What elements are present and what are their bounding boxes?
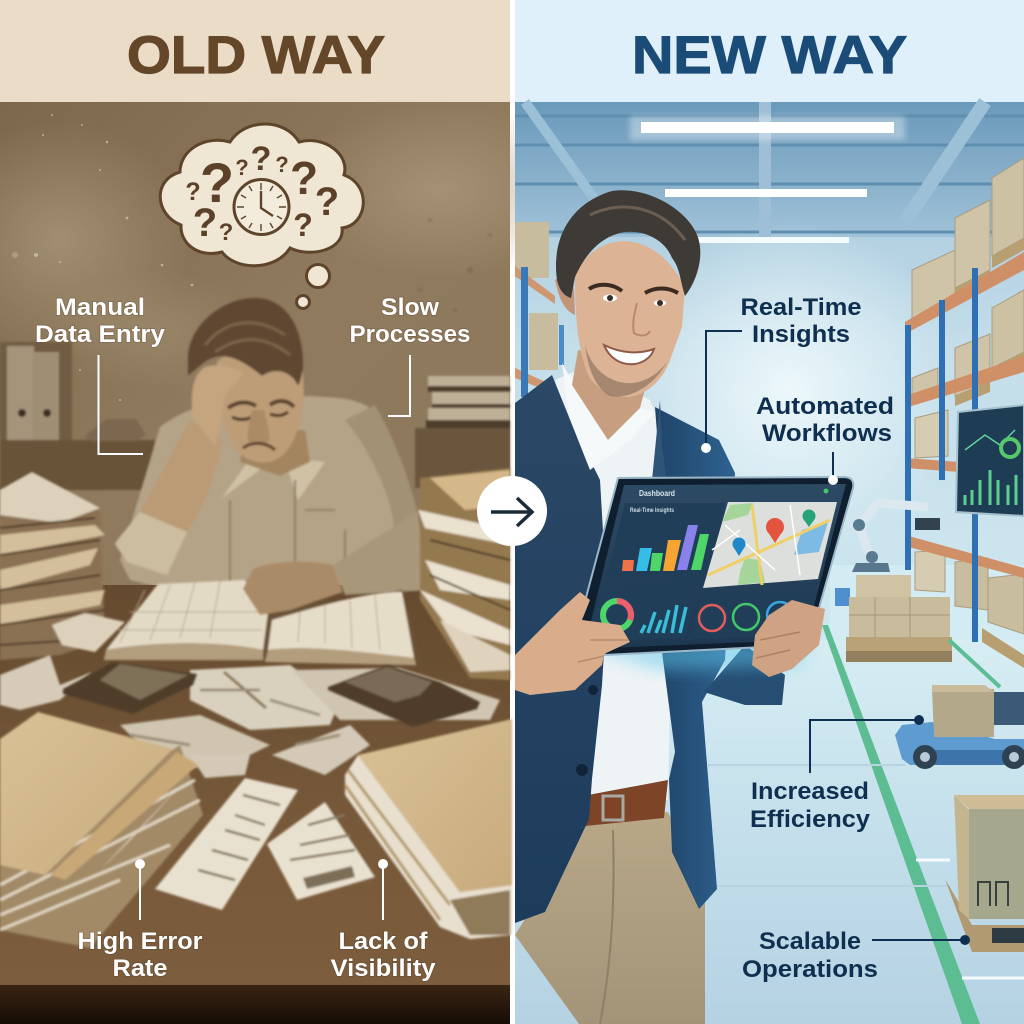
hair	[188, 298, 303, 385]
blue uprights	[908, 268, 975, 642]
label: high error rate: Rate	[112, 955, 168, 982]
tablet glow	[580, 640, 808, 670]
hand over ledger	[243, 562, 343, 615]
question marks	[185, 140, 339, 246]
paper stack and cabinet, back right	[415, 376, 510, 488]
question marks: ?	[219, 219, 233, 246]
question marks: ?	[193, 201, 217, 245]
ceiling beams	[515, 102, 1024, 240]
label: slow processes	[350, 294, 470, 416]
raised arm and hand	[115, 420, 222, 575]
shirt	[555, 365, 675, 800]
neck and head	[240, 430, 310, 476]
stubble	[585, 345, 667, 397]
label: scalable operations: Operations	[742, 956, 878, 983]
scene: sepia office wall	[0, 100, 590, 602]
desk	[0, 585, 510, 1024]
panel: old way	[0, 0, 590, 1024]
large crate on pallet	[945, 795, 1024, 952]
label: high error rate: High Error	[78, 928, 202, 955]
dashboard title bar: Dashboard	[639, 489, 675, 498]
paper stack, left	[0, 472, 125, 660]
illustration: smiling man	[515, 190, 785, 1024]
label: scalable operations: Scalable	[759, 928, 861, 955]
pallet boxes	[846, 575, 952, 662]
smile	[604, 345, 654, 364]
label: increased efficiency	[750, 715, 924, 833]
icon: clock	[234, 180, 289, 234]
automated guided vehicle	[895, 685, 1024, 769]
heading: new way: NEW WAY	[632, 26, 907, 85]
pallets	[955, 238, 1024, 668]
label: automated workflows	[756, 393, 894, 485]
label: slow processes: Processes	[350, 321, 470, 348]
question marks: ?	[290, 152, 318, 204]
floor lines	[708, 625, 1024, 1024]
torso and shirt	[120, 396, 430, 590]
label: manual data entry: Manual	[55, 294, 145, 321]
hands holding tablet	[515, 592, 825, 695]
label: lack of visibility: Lack of	[338, 928, 429, 955]
tablet dashboard	[580, 477, 853, 655]
calculators	[63, 662, 480, 727]
label: increased efficiency: Efficiency	[750, 806, 871, 833]
arrow badge	[477, 476, 547, 546]
receipts	[155, 778, 375, 910]
shelves, left	[515, 222, 564, 397]
panel: new way	[515, 0, 1024, 1024]
stacked cartons	[912, 158, 1024, 634]
question marks: ?	[235, 155, 249, 180]
label: real-time insights	[701, 294, 862, 453]
label: real-time insights: Insights	[752, 321, 850, 348]
label: lack of visibility: Visibility	[330, 955, 436, 982]
robot arm	[835, 503, 940, 606]
thought bubble: clock and question marks	[160, 124, 363, 308]
gauge panel	[687, 590, 807, 640]
donut and mini bars panel	[588, 582, 702, 642]
trousers	[515, 812, 705, 1024]
question marks: ?	[315, 180, 339, 224]
map panel	[703, 502, 837, 588]
label: high error rate	[78, 859, 202, 982]
chart panel	[605, 503, 725, 582]
question marks: ?	[185, 178, 201, 206]
ceiling lights	[630, 116, 905, 243]
label: manual data entry: Data Entry	[35, 321, 166, 348]
question marks: ?	[275, 152, 289, 177]
wall monitor	[956, 405, 1024, 516]
belt	[585, 780, 668, 826]
label: increased efficiency: Increased	[751, 778, 869, 805]
label: automated workflows: Automated	[756, 393, 894, 420]
neck	[572, 350, 650, 440]
manila folders, front	[0, 712, 512, 948]
question marks: ?	[293, 207, 313, 243]
illustration: stressed man	[115, 298, 430, 590]
scattered papers	[0, 655, 500, 778]
hair	[556, 190, 700, 298]
jacket	[515, 375, 607, 923]
label: automated workflows: Workflows	[762, 420, 892, 447]
heading: old way: OLD WAY	[127, 26, 385, 85]
label: manual data entry	[35, 294, 166, 454]
eyes and brows	[589, 285, 678, 293]
collar	[562, 363, 655, 470]
binders on shelf	[0, 342, 155, 490]
label: real-time insights: Real-Time	[740, 294, 862, 321]
label: slow processes: Slow	[381, 294, 439, 321]
head	[575, 241, 685, 397]
sleeve and forearm on desk	[333, 512, 430, 595]
question marks: ?	[200, 151, 234, 214]
scene: warehouse	[515, 102, 1024, 1024]
open ledger	[102, 562, 424, 668]
chart panel: Real-Time Insights	[630, 508, 675, 514]
label: scalable operations	[742, 928, 970, 983]
question marks: ?	[251, 140, 271, 178]
paper stack, right	[418, 468, 510, 680]
shelves, right	[905, 158, 1024, 668]
label: lack of visibility	[330, 859, 436, 982]
orange beams	[905, 252, 1024, 578]
